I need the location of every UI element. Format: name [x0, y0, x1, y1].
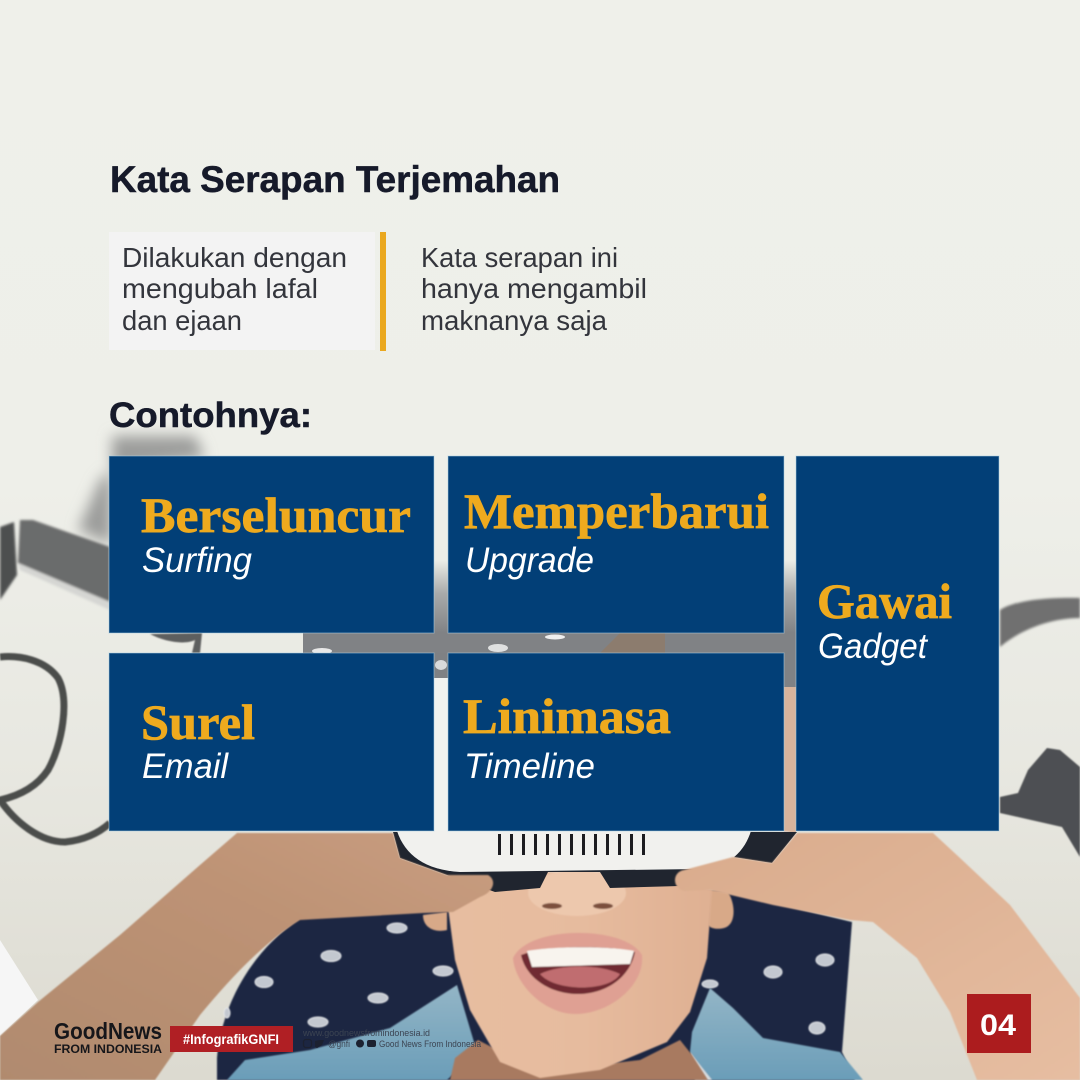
- card: Linimasa: [448, 653, 784, 831]
- ears: [423, 890, 734, 931]
- camera lens blur: [78, 436, 205, 545]
- card: Linimasa: Linimasa: [463, 688, 671, 744]
- mouth: [513, 933, 642, 1014]
- social links: [302, 1028, 482, 1050]
- strap end under card: [150, 633, 202, 653]
- panel: left description: dan ejaan: [122, 305, 242, 336]
- card: Gawai: Gadget: [818, 627, 928, 666]
- hashtag badge: [170, 1026, 293, 1052]
- hashtag badge: #InfografikGNFI: [183, 1032, 279, 1047]
- panel: right description: Kata serapan ini: [421, 242, 618, 273]
- card: Berseluncur: Berseluncur: [141, 487, 411, 543]
- subheading: Contohnya:: [109, 396, 312, 435]
- headphone band: [1000, 598, 1080, 647]
- page number: [967, 994, 1031, 1053]
- left arm and hand: [0, 833, 493, 1080]
- logo: GoodNews from Indonesia: [54, 1018, 162, 1056]
- white object bottom left: [0, 940, 38, 1036]
- denim jacket: [227, 985, 863, 1080]
- panel: right description: hanya mengambil: [421, 273, 647, 304]
- card: Berseluncur: Surfing: [142, 541, 253, 580]
- card: Linimasa: Timeline: [464, 747, 595, 786]
- camera strap: [0, 657, 110, 842]
- camera body: [0, 520, 110, 610]
- headset vents: [498, 834, 645, 855]
- card: Gawai: [796, 456, 999, 831]
- card: Surel: Email: [142, 747, 229, 786]
- card: Berseluncur: [109, 456, 434, 633]
- social links: Good News From Indonesia: [379, 1039, 482, 1050]
- panel: right description: maknanya saja: [421, 305, 607, 336]
- social icons: [304, 1040, 376, 1048]
- VR headset: [393, 831, 797, 892]
- card: Surel: [109, 653, 434, 831]
- card: Gawai: Gawai: [817, 573, 952, 629]
- panel: right description: [421, 242, 647, 336]
- panel: left description: mengubah lafal: [122, 273, 318, 304]
- navy shirt: [217, 890, 855, 1080]
- social links: @gnfi: [328, 1039, 350, 1050]
- page number: 04: [980, 1009, 1016, 1042]
- logo: GoodNews from Indonesia: FROM INDONESIA: [54, 1044, 162, 1056]
- logo: GoodNews from Indonesia: GoodNews: [54, 1018, 162, 1044]
- title: Kata Serapan Terjemahan: [110, 159, 560, 200]
- divider bar: [380, 232, 386, 351]
- grey gap strips: [303, 560, 796, 832]
- card: Memperbarui: [448, 456, 784, 633]
- card: Memperbarui: Memperbarui: [464, 483, 769, 539]
- headphone earcup: [1000, 748, 1080, 857]
- neck: [450, 1040, 708, 1080]
- shirt pattern: [224, 832, 834, 1034]
- card: Surel: Surel: [141, 694, 255, 750]
- right arm and hand: [675, 833, 1080, 1080]
- card: Memperbarui: Upgrade: [465, 541, 594, 580]
- panel: left description: [109, 232, 375, 350]
- face: [447, 870, 712, 1078]
- panel: left description: Dilakukan dengan: [122, 242, 347, 273]
- social links: www.goodnewsfromindonesia.id: [302, 1028, 430, 1039]
